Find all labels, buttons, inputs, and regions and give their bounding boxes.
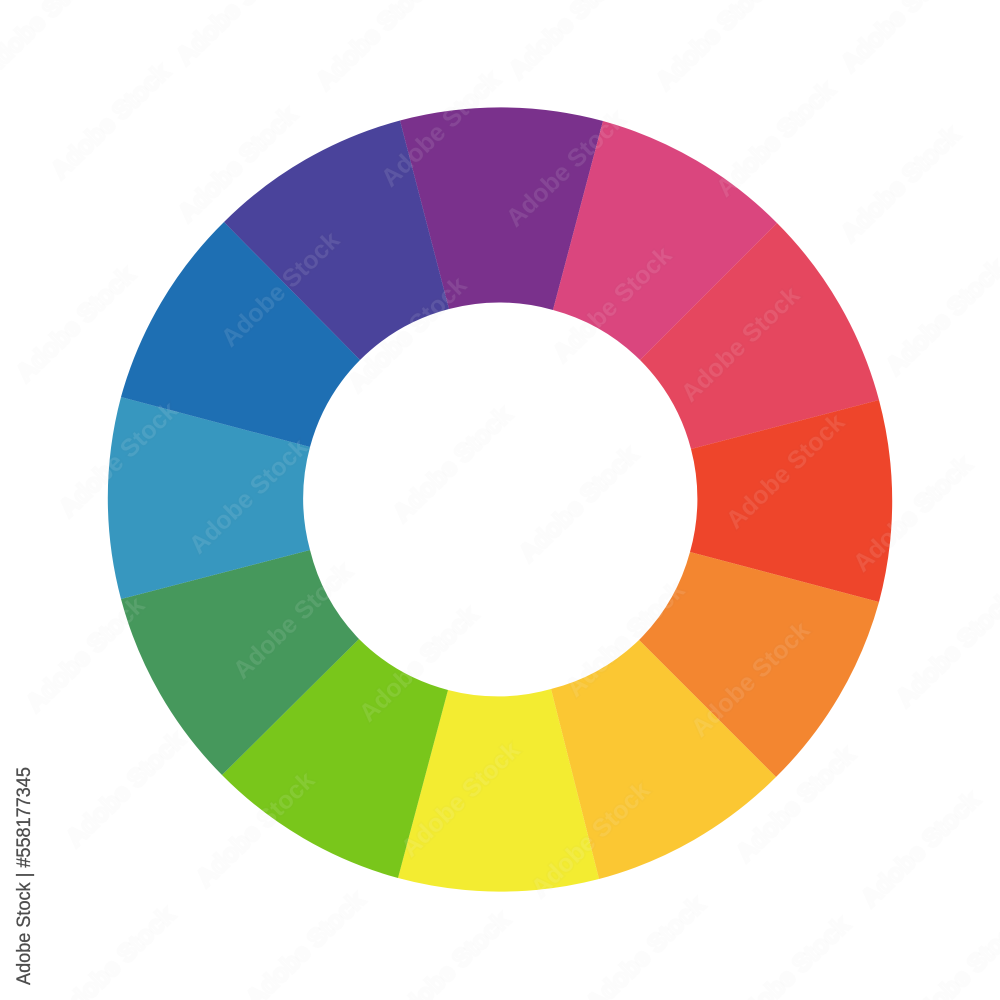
stock id label: Adobe Stock | #558177345 <box>14 767 35 985</box>
watermark pattern: Adobe Stock <box>676 281 805 407</box>
watermark pattern: Adobe Stock <box>388 401 517 527</box>
watermark pattern: Adobe Stock <box>548 241 677 367</box>
watermark pattern: Adobe Stock <box>561 576 690 702</box>
watermark pattern: Adobe Stock <box>11 261 140 387</box>
watermark pattern: Adobe Stock <box>848 451 977 577</box>
watermark pattern: Adobe Stock <box>184 433 313 559</box>
segment: teal blue <box>108 397 310 599</box>
watermark pattern: Adobe Stock <box>61 726 190 852</box>
watermark pattern: Adobe Stock <box>354 601 483 727</box>
segment: pink <box>553 121 777 360</box>
watermark pattern: Adobe Stock <box>501 106 630 232</box>
watermark pattern: Adobe Stock <box>173 101 302 227</box>
segment: amber <box>551 640 776 879</box>
watermark pattern: Adobe Stock <box>836 121 965 247</box>
segment: rose <box>640 223 879 449</box>
watermark pattern: Adobe Stock <box>216 226 345 352</box>
watermark pattern: Adobe Stock <box>711 76 840 202</box>
segment: red <box>690 400 892 602</box>
watermark pattern: Adobe Stock <box>54 396 183 522</box>
watermark pattern: Adobe Stock <box>191 766 320 892</box>
watermark pattern: Adobe Stock <box>343 271 472 397</box>
watermark pattern: Adobe Stock <box>526 776 655 902</box>
colour wheel <box>108 107 892 892</box>
segment: orange <box>639 552 879 777</box>
watermark pattern: Adobe Stock <box>376 66 505 192</box>
segment: dark green <box>121 550 359 775</box>
watermark pattern: Adobe Stock <box>396 736 525 862</box>
segment: yellow <box>398 689 599 892</box>
watermark pattern: Adobe Stock <box>856 786 985 912</box>
watermark pattern: Adobe Stock <box>686 616 815 742</box>
watermark pattern: Adobe Stock <box>721 408 850 534</box>
watermark pattern: Adobe Stock <box>21 591 150 717</box>
segment: blue <box>121 222 360 447</box>
watermark pattern: Adobe Stock <box>228 558 357 684</box>
watermark pattern: Adobe Stock <box>731 741 860 867</box>
segment: lime green <box>222 639 448 878</box>
segment: indigo <box>224 120 449 360</box>
watermark pattern: Adobe Stock <box>514 441 643 567</box>
watermark pattern: Adobe Stock <box>46 58 175 184</box>
segment: purple <box>400 107 603 310</box>
